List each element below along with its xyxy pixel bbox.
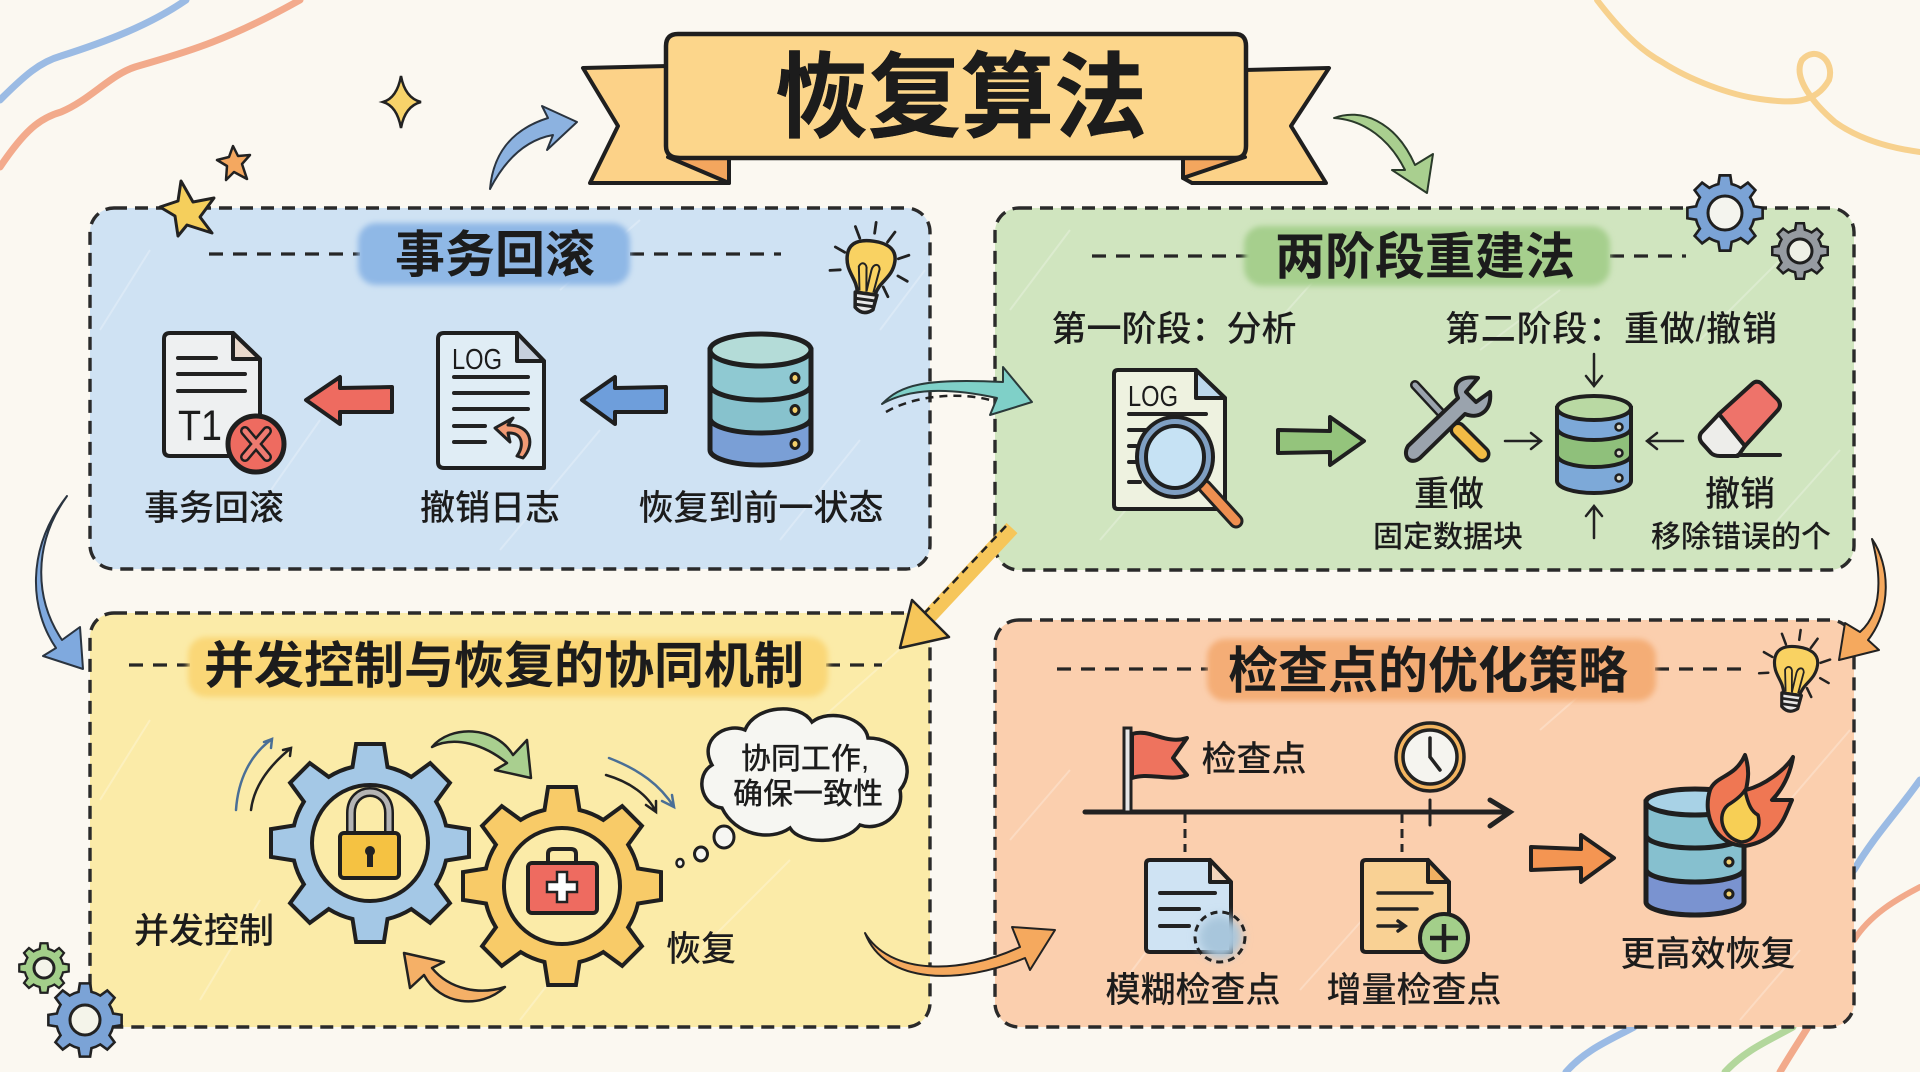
arrow: blue to concurrency panel	[36, 496, 83, 669]
icon: T1 document with error	[164, 333, 284, 472]
heading: two-phase reconstruction: 两阶段重建法	[1275, 229, 1575, 285]
heading: checkpoint optimization strategy: 检查点的优化策略	[1228, 643, 1628, 699]
arrow: green	[1278, 417, 1364, 465]
icon: blue small gear	[48, 983, 122, 1057]
arrow: orange	[1531, 835, 1614, 882]
arrow: red	[306, 377, 392, 424]
banner left tail	[583, 66, 729, 183]
motion lines: blue gear	[236, 739, 674, 812]
arrow: yellow to concurrency panel	[900, 526, 1012, 648]
title text: 恢复算法	[775, 46, 1147, 150]
thought cloud	[676, 709, 907, 867]
arrow: blue to banner	[490, 106, 577, 189]
icon: wrench and screwdriver	[1406, 377, 1490, 461]
arrow: tools to database	[1505, 433, 1541, 449]
icon: blue gear with padlock	[271, 744, 469, 942]
icon: undo log document: LOG	[452, 344, 502, 376]
arrow: orange down right side	[1839, 539, 1886, 660]
section heading dashes	[129, 663, 882, 667]
heading highlight	[1207, 639, 1656, 701]
banner right fold	[1183, 157, 1245, 178]
icon: undo log document	[438, 333, 544, 468]
arrow: green from banner	[1334, 115, 1433, 193]
icon: fuzzy checkpoint document	[1146, 860, 1245, 962]
panel background	[90, 613, 930, 1027]
heading: transaction rollback: 事务回滚	[395, 227, 595, 283]
label: incremental checkpoint: 增量检查点	[1326, 971, 1502, 1010]
arrow: bottom to database	[1586, 506, 1602, 538]
title banner	[583, 34, 1329, 183]
icon: log with magnifier	[1114, 370, 1236, 521]
icon: database with flame	[1646, 755, 1793, 915]
label: redo: 重做	[1414, 475, 1484, 514]
panel: checkpoint optimization	[995, 620, 1854, 1027]
icon: clock	[1396, 723, 1464, 791]
icon: log with magnifier: LOG	[1128, 381, 1178, 413]
timeline	[1085, 800, 1510, 852]
banner left fold	[668, 157, 729, 183]
icon: eraser	[1700, 382, 1780, 456]
label: transaction rollback: 事务回滚	[144, 489, 284, 528]
label: checkpoint: 检查点	[1201, 740, 1307, 779]
label: remove erroneous items: 移除错误的个	[1651, 521, 1831, 554]
panel background	[995, 620, 1854, 1027]
panel background	[90, 208, 930, 569]
icon: light bulb	[825, 217, 915, 318]
panel: concurrency and recovery	[90, 613, 930, 1027]
section heading dashes	[1057, 667, 1744, 671]
icon: green small gear	[19, 943, 69, 993]
label: undo log: 撤销日志	[420, 489, 560, 528]
arrow: phase label to database	[1586, 354, 1602, 386]
icon: database	[710, 334, 811, 465]
label: fix data blocks: 固定数据块	[1373, 521, 1523, 554]
label: restore previous state: 恢复到前一状态	[638, 489, 884, 528]
decoration: large star	[160, 181, 214, 236]
panel: two-phase reconstruction	[995, 175, 1854, 570]
label: undo: 撤销	[1705, 475, 1775, 514]
icon: T1 document with error: T1	[178, 402, 222, 450]
label: phase two redo undo: 第二阶段：重做/撤销	[1445, 310, 1777, 349]
decoration: small star	[217, 146, 250, 180]
icon: grey gear	[1772, 223, 1828, 279]
section heading dashes	[209, 252, 781, 256]
icon: checkpoint flag	[1124, 728, 1187, 812]
heading highlight	[358, 223, 630, 285]
heading: concurrency and recovery coordination: 并发控制与恢复的协同机制	[204, 638, 804, 694]
thought cloud: 确保一致性	[733, 778, 883, 811]
label: concurrency control: 并发控制	[134, 912, 274, 951]
panel: transaction rollback	[90, 208, 930, 569]
label: recovery: 恢复	[666, 930, 736, 969]
label: fuzzy checkpoint: 模糊检查点	[1105, 971, 1281, 1010]
arrow: orange between gears	[404, 953, 505, 1001]
decoration: four-point star	[383, 76, 421, 128]
thought cloud: 协同工作,	[741, 743, 869, 776]
icon: yellow gear with first aid kit	[463, 787, 661, 985]
arrow: green between gears	[432, 731, 531, 778]
label: more efficient recovery: 更高效恢复	[1620, 935, 1796, 974]
section heading dashes	[1092, 254, 1686, 258]
banner main ribbon	[666, 34, 1246, 158]
arrow: orange to checkpoint panel	[865, 927, 1055, 976]
banner right tail	[1183, 68, 1329, 183]
icon: light bulb	[1754, 625, 1835, 716]
heading highlight	[1244, 226, 1610, 286]
heading highlight	[188, 637, 828, 697]
icon: incremental checkpoint document	[1362, 860, 1468, 962]
arrow: blue	[582, 377, 666, 424]
icon: blue gear	[1687, 175, 1763, 251]
label: phase one analysis: 第一阶段：分析	[1051, 310, 1297, 349]
arrow: teal from rollback to reconstruction	[882, 367, 1032, 415]
arrow: eraser to database	[1647, 433, 1683, 449]
panel background	[995, 208, 1854, 570]
icon: database	[1557, 396, 1631, 493]
